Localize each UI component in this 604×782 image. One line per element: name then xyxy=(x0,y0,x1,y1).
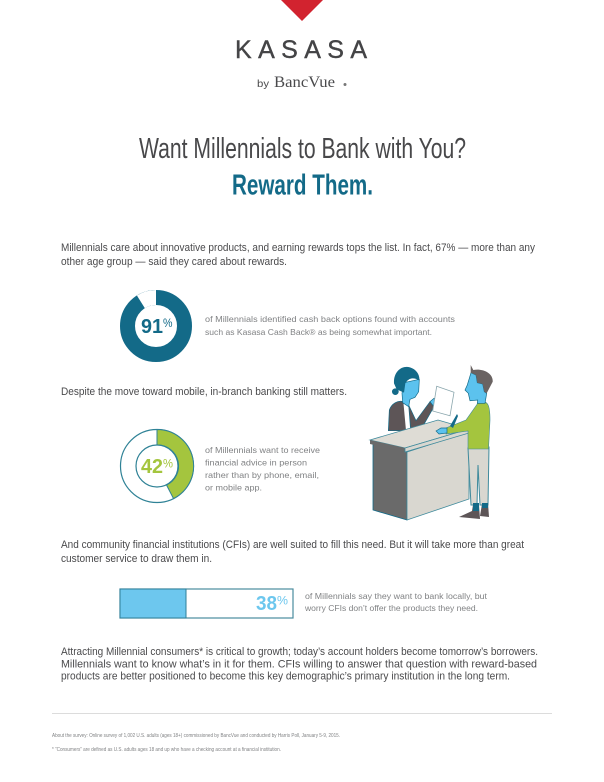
text block: conclusion xyxy=(61,646,538,682)
man customer xyxy=(436,365,493,519)
text block: intro xyxy=(61,242,536,268)
text block: intro: Millennials care about innovative products, and earning rewards tops the list. In fact, 67% — more than any xyxy=(61,242,536,254)
chart: 42% donut: % xyxy=(163,458,173,470)
chart: 91% donut xyxy=(128,290,184,354)
text block: community institutions xyxy=(61,539,524,565)
paper xyxy=(433,386,454,416)
chart: 91% donut: % xyxy=(163,318,172,330)
text block: conclusion: products are better positioned to become this key demographic’s primary institution in the long term. xyxy=(61,670,510,682)
chart: 38% bar xyxy=(120,589,293,618)
title: Want Millennials to Bank with You? xyxy=(139,133,466,165)
text block: 38% description xyxy=(304,591,488,613)
icon: red triangle logo mark xyxy=(281,0,323,21)
chart: 38% bar: % xyxy=(277,596,288,608)
text block: 38% description: of Millennials say they want to bank locally, but xyxy=(305,591,488,601)
title: Reward Them. xyxy=(232,170,373,202)
footnotes: * “Consumers” are defined as U.S. adults ages 18 and up who have a checking account at a financial institution. xyxy=(52,747,281,753)
text block: in-branch: Despite the move toward mobile, in-branch banking still matters. xyxy=(61,386,347,398)
text block: 42% description: rather than by phone, email, xyxy=(205,470,319,480)
text block: community institutions: And community financial institutions (CFIs) are well suited to fill this need. But it will take more than great xyxy=(61,539,524,551)
logo: Kasasa by BancVue: by xyxy=(257,78,270,90)
logo: Kasasa by BancVue: BancVue xyxy=(274,74,335,91)
text block: 42% description: financial advice in person xyxy=(205,458,307,468)
footnotes: About the survey: Online survey of 1,002 U.S. adults (ages 18+) commissioned by BancVue and conducted by Harris Poll, January 5-9, 2015. xyxy=(52,733,340,739)
text block: 91% description: such as Kasasa Cash Back® as being somewhat important. xyxy=(205,327,432,337)
text block: 91% description: of Millennials identified cash back options found with accounts xyxy=(205,314,455,324)
chart: 42% donut xyxy=(120,429,194,502)
text block: conclusion: Attracting Millennial consumers* is critical to growth; today’s account holders become tomorrow’s borrowers. xyxy=(61,646,538,658)
text block: community institutions: customer service to draw them in. xyxy=(61,553,212,565)
text block: intro: other age group — said they cared about rewards. xyxy=(61,256,287,268)
woman teller xyxy=(388,367,437,431)
logo: Kasasa by BancVue xyxy=(235,36,367,91)
counter xyxy=(370,420,469,520)
text block: 42% description: or mobile app. xyxy=(205,482,262,492)
illustration: teller and customer at counter xyxy=(370,365,493,520)
text block: 91% description xyxy=(205,314,455,337)
text block: 42% description xyxy=(205,445,320,492)
chart: 38% bar: 38 xyxy=(256,592,277,615)
text block: conclusion: Millennials want to know what’s in it for them. CFIs willing to answer that question with reward-based xyxy=(61,658,537,670)
footnotes xyxy=(52,733,340,753)
text block: 38% description: worry CFIs don’t offer the products they need. xyxy=(304,603,478,613)
logo: Kasasa by BancVue: KASASA xyxy=(235,36,367,64)
chart: 42% donut: 42 xyxy=(141,455,163,478)
chart: 91% donut: 91 xyxy=(141,315,163,338)
text block: 42% description: of Millennials want to receive xyxy=(205,445,320,455)
title xyxy=(139,133,466,202)
